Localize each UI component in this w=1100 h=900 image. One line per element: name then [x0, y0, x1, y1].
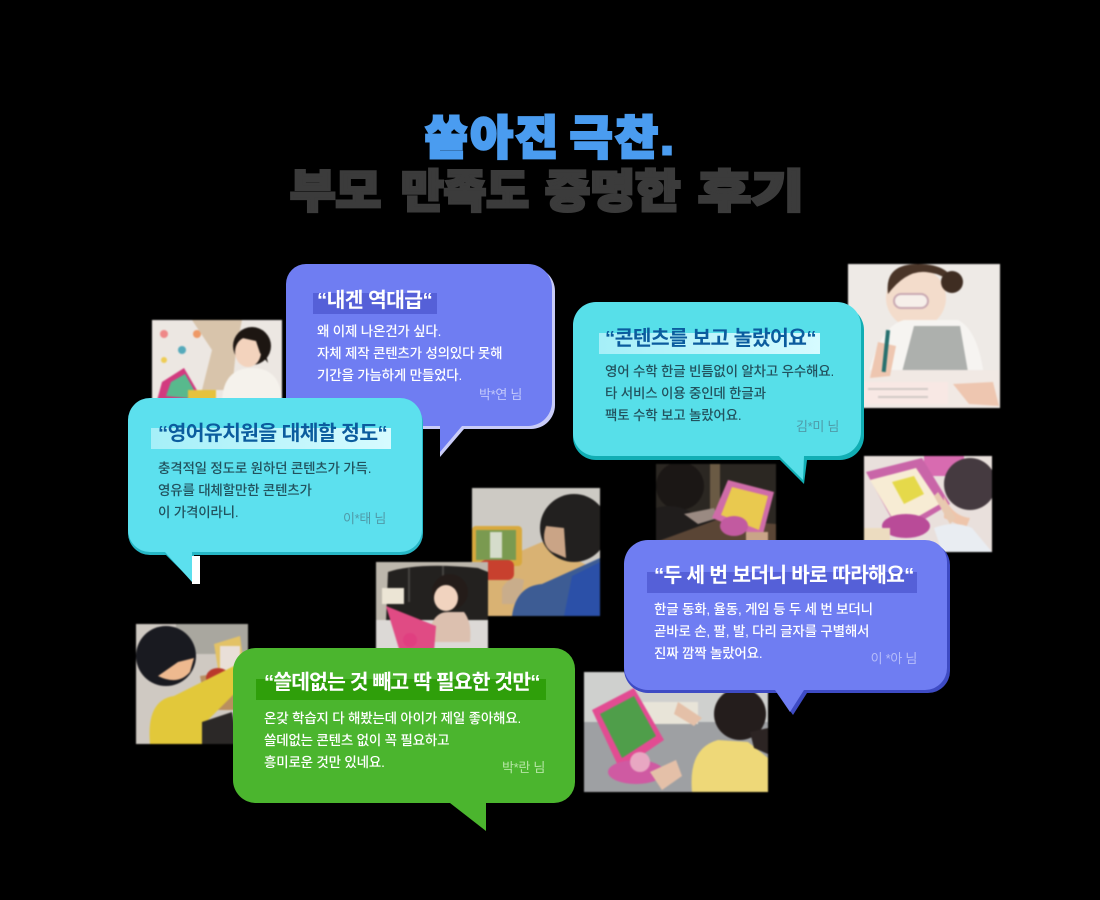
title: first line: 쏟아진 — [425, 112, 561, 164]
panel: review 쓸데없는 것 빼고 딱 필요한 것만 — [233, 648, 575, 831]
review text — [317, 324, 502, 383]
reviewer name: 이 *아 님 — [871, 651, 917, 666]
reviewer name: 박*란 님 — [502, 760, 545, 775]
title: second line: 후기 — [698, 166, 804, 217]
heading highlight — [599, 333, 820, 354]
title: second line — [290, 166, 804, 217]
photo: girl with glasses drawing — [846, 262, 1002, 410]
title: first line: 극찬. — [570, 112, 676, 164]
heading highlight — [647, 572, 917, 593]
panel: review 영어유치원을 대체할 정도 — [128, 398, 423, 584]
photo: girl drawing on tablet — [862, 454, 994, 554]
heading highlight — [313, 293, 437, 314]
heading highlight — [256, 679, 546, 700]
review text: 영어 수학 한글 빈틈없이 알차고 우수해요. — [605, 364, 834, 379]
review text: 왜 이제 나온건가 싶다. — [317, 324, 441, 339]
title: second line: 증명한 — [545, 166, 680, 217]
reviewer name: 이*태 님 — [343, 511, 386, 526]
heading: “두 세 번 보더니 바로 따라해요“ — [654, 565, 914, 587]
review text: 온갖 학습지 다 해봤는데 아이가 제일 좋아해요. — [264, 711, 521, 726]
review text: 곧바로 손, 팔, 발, 다리 글자를 구별해서 — [654, 624, 869, 639]
review text: 타 서비스 이용 중인데 한글과 — [605, 386, 766, 401]
review text: 팩토 수학 보고 놀랐어요. — [605, 408, 741, 423]
review text — [654, 602, 873, 661]
review text: 자체 제작 콘텐츠가 성의있다 못해 — [317, 346, 502, 361]
reviewer name: 김*미 님 — [796, 419, 839, 434]
review text — [158, 461, 371, 520]
review text: 이 가격이라니. — [158, 505, 238, 520]
review text: 기간을 가늠하게 만들었다. — [317, 368, 462, 383]
review text: 흥미로운 것만 있네요. — [264, 755, 385, 770]
reviewer name: 박*연 님 — [479, 387, 522, 402]
review text: 진짜 깜짝 놀랐어요. — [654, 646, 762, 661]
heading: “쓸데없는 것 빼고 딱 필요한 것만“ — [264, 672, 540, 694]
review text — [605, 364, 834, 423]
review text: 쓸데없는 콘텐츠 없이 꼭 필요하고 — [264, 733, 449, 748]
panel: review 내겐 역대급 — [286, 264, 555, 457]
photo: child with pink tablet — [656, 463, 777, 540]
review text: 영유를 대체할만한 콘텐츠가 — [158, 483, 312, 498]
heading: “내겐 역대급“ — [317, 290, 432, 312]
photo: girl with colourful wall — [150, 318, 284, 398]
panel: review 두 세 번 보더니 바로 따라해요 — [624, 540, 950, 715]
title: second line: 만족도 — [401, 166, 529, 217]
photo: boy in yellow shirt — [135, 623, 249, 745]
heading highlight — [151, 428, 391, 449]
photo: girl in yellow touching pink tablet — [583, 671, 770, 794]
review text — [264, 711, 521, 770]
review text: 충격적일 정도로 원하던 콘텐츠가 가득. — [158, 461, 371, 476]
review text: 한글 동화, 율동, 게임 등 두 세 번 보더니 — [654, 602, 873, 617]
title: first line — [424, 112, 676, 164]
panel: review 콘텐츠를 보고 놀랐어요 — [573, 302, 864, 484]
photo: boy facing yellow tablet — [471, 487, 601, 617]
title: second line: 부모 — [290, 166, 381, 217]
photo: girl on black sofa with pink tablet — [375, 561, 489, 648]
heading: “영어유치원을 대체할 정도“ — [158, 423, 387, 445]
heading: “콘텐츠를 보고 놀랐어요“ — [605, 328, 816, 350]
